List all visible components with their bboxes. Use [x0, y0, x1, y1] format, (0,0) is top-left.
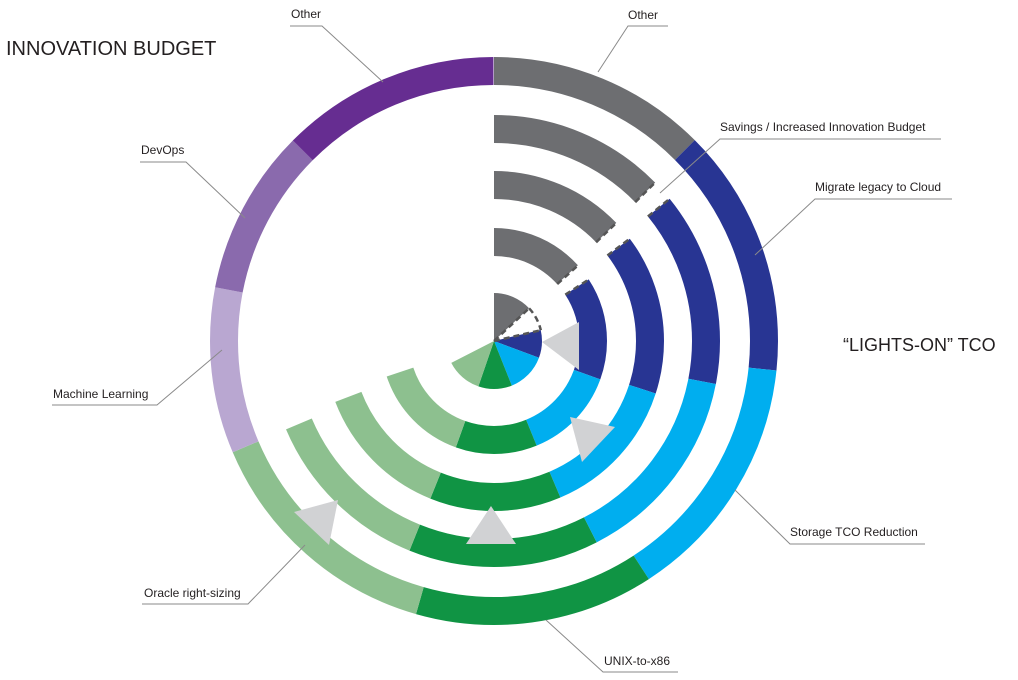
labels: Storage TCO Reduction — [790, 525, 918, 539]
title: lights-on TCO: “LIGHTS-ON” TCO — [843, 335, 996, 355]
labels: Machine Learning — [53, 387, 148, 401]
chart: concentric rings — [224, 71, 764, 611]
labels: DevOps — [141, 143, 184, 157]
labels: Savings / Increased Innovation Budget — [720, 120, 926, 134]
ring: outer — [224, 71, 764, 611]
labels: Migrate legacy to Cloud — [815, 180, 941, 194]
labels: UNIX-to-x86 — [604, 654, 670, 668]
pie: center — [470, 317, 518, 365]
ring: second — [282, 129, 706, 553]
title: innovation budget: INNOVATION BUDGET — [6, 38, 216, 60]
dashed savings outlines — [494, 183, 670, 341]
labels: Oracle right-sizing — [144, 586, 241, 600]
ring: third — [338, 185, 650, 497]
ring: fourth — [395, 242, 593, 440]
labels: Other — [291, 7, 321, 21]
arrows: gray triangles — [294, 322, 615, 545]
labels: Other — [628, 8, 658, 22]
